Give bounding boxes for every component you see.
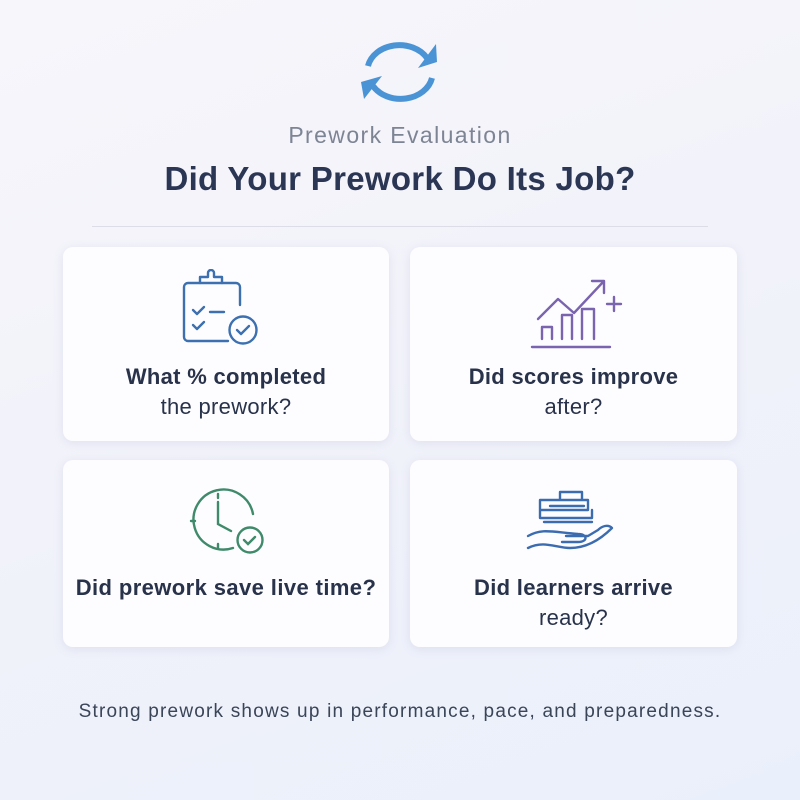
text: after?: [544, 394, 603, 419]
panel: ready: [410, 460, 737, 647]
text: the prework?: [161, 394, 291, 419]
panel: time: [63, 460, 389, 647]
footer text: Strong prework shows up in performance, pace, and preparedness.: [79, 701, 721, 722]
panel: completion: [63, 247, 389, 441]
icon: refresh: [361, 42, 437, 102]
icon: clipboard: [182, 269, 258, 345]
icon: chart: [530, 280, 622, 348]
text: Did learners arrive: [474, 575, 673, 600]
text: [126, 364, 326, 419]
text: ready?: [539, 605, 608, 630]
text: What % completed: [126, 364, 326, 389]
icon: clock: [190, 488, 264, 554]
title: Did Your Prework Do Its Job?: [164, 160, 636, 197]
text: [474, 575, 673, 630]
panel: scores: [410, 247, 737, 441]
text: Did scores improve: [469, 364, 678, 389]
text: Did prework save live time?: [76, 575, 376, 600]
icon: hand with books: [526, 490, 614, 550]
subtitle: Prework Evaluation: [288, 122, 512, 148]
text: [469, 364, 678, 419]
